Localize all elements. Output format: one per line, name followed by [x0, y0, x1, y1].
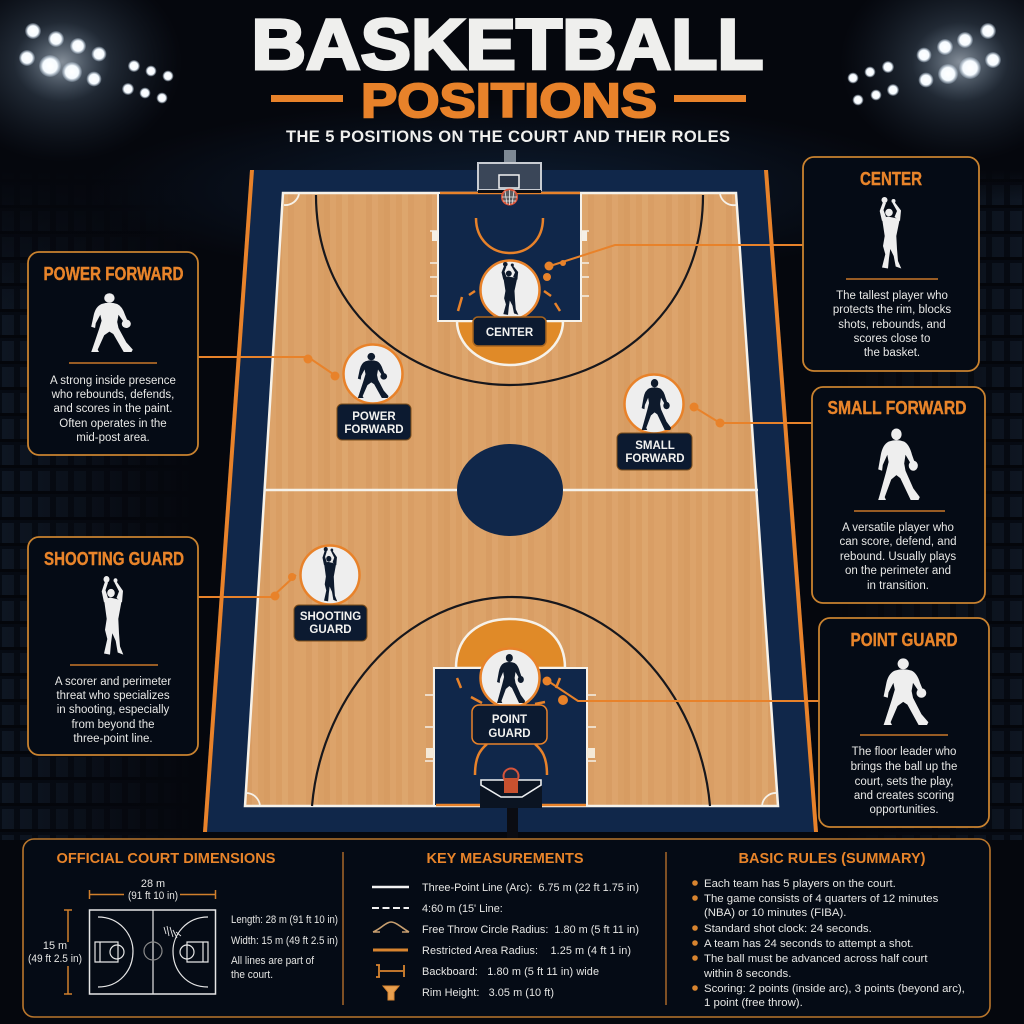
- icon: three-point line: [372, 886, 409, 888]
- section: key measurements: Rim Height: 3.05 m (10 ft): [422, 987, 554, 999]
- description: The floor leader who: [852, 746, 956, 758]
- label: small forward: SMALL: [635, 440, 675, 452]
- label: small forward: [617, 433, 692, 470]
- bullet list: Each team has 5 players on the court.: [704, 878, 896, 890]
- description: the basket.: [864, 347, 920, 359]
- dimension: width: (49 ft 2.5 in): [28, 953, 82, 965]
- floodlights right: [840, 0, 1024, 162]
- center circle: [457, 444, 563, 536]
- heading: SHOOTING GUARD: [44, 549, 184, 569]
- dimension: width: [28, 910, 82, 994]
- section: key measurements: Backboard: 1.80 m (5 ft 11 in) wide: [422, 966, 599, 978]
- section: key measurements: Free Throw Circle Radius: 1.80 m (5 ft 11 in): [422, 924, 639, 936]
- description: [851, 746, 957, 816]
- icon: player dribbling: [91, 293, 133, 352]
- label: shooting guard: GUARD: [309, 624, 352, 636]
- heading: CENTER: [860, 169, 922, 189]
- court surround: [203, 170, 818, 832]
- section: basic rules: BASIC RULES (SUMMARY): [738, 851, 926, 867]
- token: power forward: [344, 344, 402, 404]
- description: on the perimeter and: [845, 565, 951, 577]
- dimension: width: 15 m: [43, 940, 67, 952]
- description: brings the ball up the: [851, 761, 957, 773]
- three point arcs: [316, 195, 703, 385]
- description: protects the rim, blocks: [833, 304, 951, 316]
- token: point guard: [480, 648, 540, 708]
- description: A strong inside presence: [50, 375, 176, 387]
- dimension notes: [231, 914, 338, 981]
- description: mid-post area.: [76, 432, 150, 444]
- basketball court: [203, 170, 818, 832]
- connector: power forward: [198, 354, 340, 380]
- label: shooting guard: [294, 605, 367, 641]
- dimension notes: the court.: [231, 969, 273, 981]
- boundary lines: [245, 193, 778, 806]
- bullet list: Standard shot clock: 24 seconds.: [704, 923, 872, 935]
- bullet list: Scoring: 2 points (inside arc), 3 points (beyond arc),: [704, 983, 965, 995]
- description: court, sets the play,: [855, 776, 953, 788]
- description: threat who specializes: [56, 690, 170, 702]
- description: who rebounds, defends,: [51, 389, 174, 401]
- label: point guard: POINT: [492, 714, 527, 726]
- panel: small forward: [812, 387, 985, 603]
- dimension: length: 28 m: [141, 878, 165, 890]
- description: in transition.: [867, 580, 929, 592]
- panel: point guard: [819, 618, 989, 827]
- connector: point guard: [542, 676, 819, 705]
- description: shots, rebounds, and: [838, 319, 946, 331]
- dimension notes: Width: 15 m (49 ft 2.5 in): [231, 935, 338, 947]
- description: in shooting, especially: [57, 704, 170, 716]
- icon: restricted area: [373, 948, 408, 952]
- description: [55, 676, 171, 745]
- wood floor: [240, 190, 785, 810]
- section: key measurements: KEY MEASUREMENTS: [426, 851, 584, 867]
- description: A scorer and perimeter: [55, 676, 171, 688]
- title: [252, 6, 764, 146]
- bottom free throw semicircle: [456, 619, 565, 668]
- label: center: CENTER: [486, 327, 534, 339]
- description: from beyond the: [71, 719, 155, 731]
- title: THE 5 POSITIONS ON THE COURT AND THEIR ROLES: [286, 128, 730, 146]
- label: small forward: FORWARD: [625, 453, 685, 465]
- bullet list: (NBA) or 10 minutes (FIBA).: [704, 907, 846, 919]
- description: The tallest player who: [836, 290, 948, 302]
- section: official court dimensions: OFFICIAL COURT DIMENSIONS: [56, 851, 276, 867]
- bottom backboard and hoop: [480, 768, 542, 838]
- section: key measurements: Three-Point Line (Arc): 6.75 m (22 ft 1.75 in): [422, 882, 639, 894]
- section: key measurements: 4:60 m (15' Line:: [422, 903, 503, 915]
- bottom key: [434, 668, 587, 806]
- panel: power forward: [28, 252, 198, 455]
- dimension notes: All lines are part of: [231, 955, 315, 967]
- dimension notes: Length: 28 m (91 ft 10 in): [231, 914, 338, 926]
- connector: small forward: [690, 402, 812, 428]
- top key: [438, 193, 581, 321]
- key dashes: [457, 291, 560, 704]
- bullet list: The ball must be advanced across half court: [704, 953, 928, 965]
- bullet list: 1 point (free throw).: [704, 997, 803, 1009]
- token: center: [480, 260, 540, 320]
- description: can score, defend, and: [840, 536, 956, 548]
- title: BASKETBALL: [252, 6, 764, 85]
- section: official court dimensions: [28, 851, 338, 994]
- bullet list: The game consists of 4 quarters of 12 minutes: [704, 893, 939, 905]
- dimension: length: (91 ft 10 in): [128, 890, 178, 902]
- icon: player dribbling: [884, 658, 928, 725]
- description: [50, 375, 176, 444]
- icon: backboard: [376, 965, 404, 977]
- description: and scores in the paint.: [54, 403, 172, 415]
- label: point guard: GUARD: [488, 728, 531, 740]
- top free throw semicircle: [457, 321, 563, 365]
- heading: SMALL FORWARD: [828, 398, 967, 418]
- panel: shooting guard: [28, 537, 198, 755]
- icon: player dribbling: [878, 428, 920, 500]
- description: A versatile player who: [842, 522, 954, 534]
- description: scores close to: [854, 333, 930, 345]
- floodlights left: [0, 0, 182, 162]
- icon: player shooting: [880, 197, 901, 268]
- heading: POINT GUARD: [850, 630, 958, 650]
- label: center: [473, 317, 546, 346]
- corner arcs: [246, 194, 777, 806]
- mini court diagram: [90, 910, 216, 994]
- description: [840, 522, 956, 592]
- panel: bottom information: [23, 839, 990, 1017]
- description: opportunities.: [869, 804, 939, 816]
- token: shooting guard: [300, 546, 360, 604]
- description: three-point line.: [73, 733, 153, 745]
- bullet list: within 8 seconds.: [703, 968, 791, 980]
- icon: rim: [383, 986, 399, 1000]
- bullet list: A team has 24 seconds to attempt a shot.: [704, 938, 914, 950]
- title: POSITIONS: [361, 75, 657, 128]
- heading: POWER FORWARD: [44, 264, 184, 284]
- top backboard and hoop: [478, 150, 541, 205]
- label: power forward: [337, 404, 411, 440]
- key hash marks: [425, 231, 596, 761]
- label: power forward: POWER: [352, 411, 396, 423]
- description: Often operates in the: [59, 418, 167, 430]
- label: shooting guard: SHOOTING: [300, 611, 361, 623]
- section: key measurements: [372, 851, 639, 1000]
- description: [833, 290, 951, 359]
- dimension: length: [90, 878, 216, 902]
- label: point guard: [472, 705, 547, 744]
- panel: center: [803, 157, 979, 371]
- bullet list: [692, 878, 965, 1009]
- icon: dashed line: [372, 907, 409, 909]
- token: small forward: [624, 374, 684, 434]
- connector: shooting guard: [198, 573, 296, 600]
- icon: free throw arc: [373, 922, 409, 932]
- description: and creates scoring: [854, 790, 954, 802]
- section: key measurements: Restricted Area Radius: 1.25 m (4 ft 1 in): [422, 945, 631, 957]
- connector: center: [543, 245, 803, 281]
- label: power forward: FORWARD: [344, 424, 404, 436]
- icon: player shooting: [102, 576, 123, 655]
- section: basic rules: [692, 851, 965, 1009]
- description: rebound. Usually plays: [840, 551, 956, 563]
